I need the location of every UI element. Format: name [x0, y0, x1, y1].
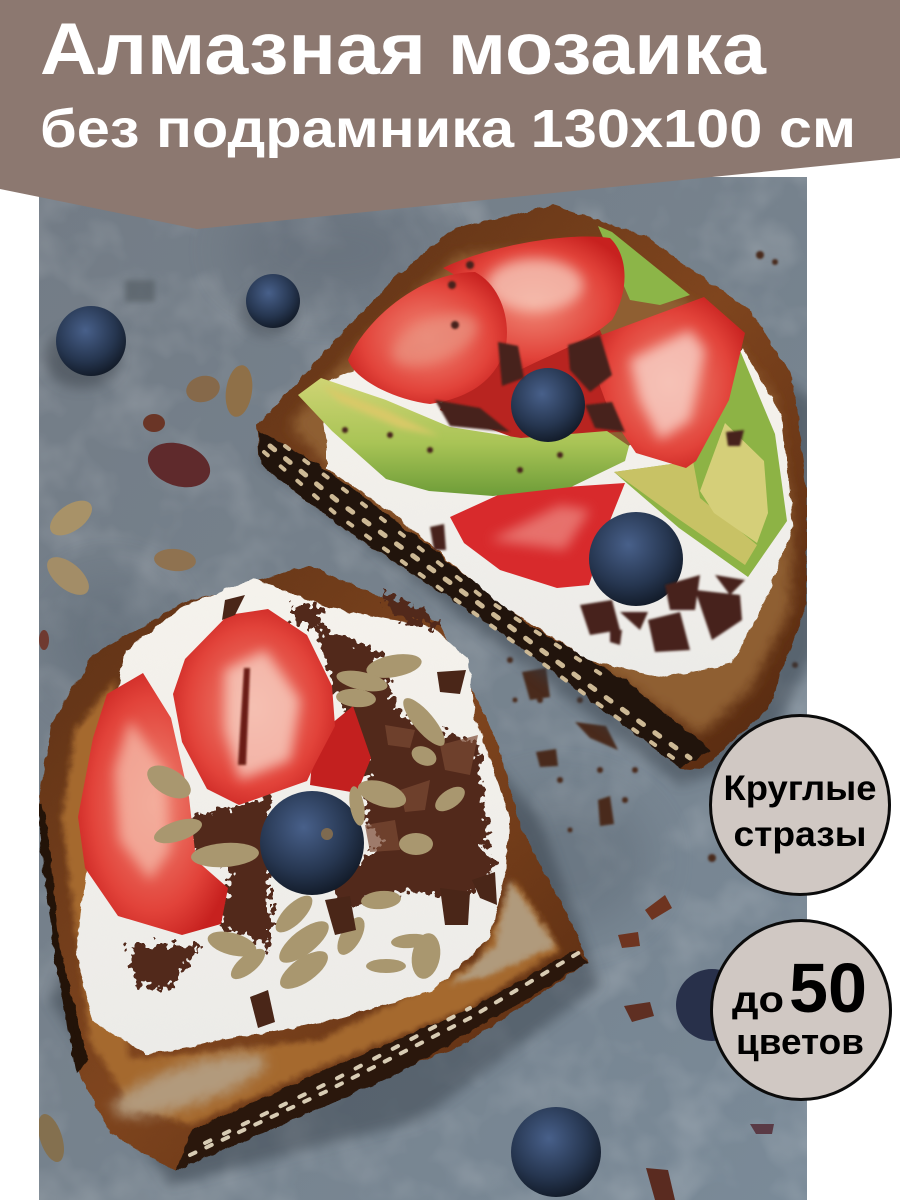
badge: up to 50 colours: цветов — [736, 1021, 864, 1062]
top toast — [257, 205, 815, 785]
badge: up to 50 colours: 50 — [789, 949, 867, 1027]
avocado slice — [298, 378, 629, 496]
strawberry small behind — [310, 706, 371, 793]
chocolate flake highlights — [365, 725, 478, 852]
bread crumb — [290, 245, 792, 735]
badge: round rhinestones: стразы — [734, 815, 866, 854]
bread crumb light patch, lower left — [108, 1041, 272, 1129]
sesame seeds on bottom toast — [190, 952, 580, 1155]
top avocado sliver — [598, 226, 690, 305]
cream — [318, 348, 793, 677]
bottom toast — [39, 566, 600, 1185]
blueberry — [260, 791, 364, 895]
right avocado — [614, 348, 787, 577]
sesame seeds on top toast — [264, 446, 690, 763]
photo: toasts on grey stone table — [33, 177, 815, 1200]
chocolate shavings, top toast — [342, 261, 745, 652]
strawberry left — [78, 673, 228, 935]
subtitle: без подрамника 130х100 см — [40, 99, 856, 159]
toast shadow — [48, 768, 602, 1188]
badge: up to 50 colours — [712, 920, 890, 1100]
blueberries on top toast — [511, 368, 683, 606]
toast shadow — [258, 380, 807, 788]
lower strawberry — [450, 483, 625, 588]
bread crust — [257, 205, 807, 769]
scattered berries and seeds, upper left — [39, 274, 300, 650]
badge: round rhinestones: Круглые — [724, 769, 876, 808]
strawberry right — [593, 297, 745, 468]
seeded crust edge — [175, 950, 587, 1171]
strawberry centre — [173, 609, 335, 805]
badge: round rhinestones — [710, 716, 890, 894]
dark juice under fruit — [440, 330, 622, 438]
title: Алмазная мозаика — [40, 9, 768, 90]
stone background — [39, 177, 807, 1200]
charred left edge — [39, 805, 85, 1068]
cream — [76, 578, 510, 1054]
bread crust — [39, 566, 587, 1171]
header banner — [0, 0, 900, 229]
loose chocolate shavings, bottom toast — [222, 595, 497, 1028]
bread crumb — [62, 680, 560, 1125]
strawberry front left — [348, 272, 507, 404]
badge: up to 50 colours: до — [732, 979, 784, 1020]
strawberry back — [443, 237, 625, 370]
bread crumb light patch, right — [450, 880, 555, 985]
scattered items, lower area — [33, 251, 798, 1200]
sunflower seeds — [142, 650, 469, 996]
chocolate mounds — [130, 590, 497, 990]
seeded crust edge — [258, 430, 710, 768]
